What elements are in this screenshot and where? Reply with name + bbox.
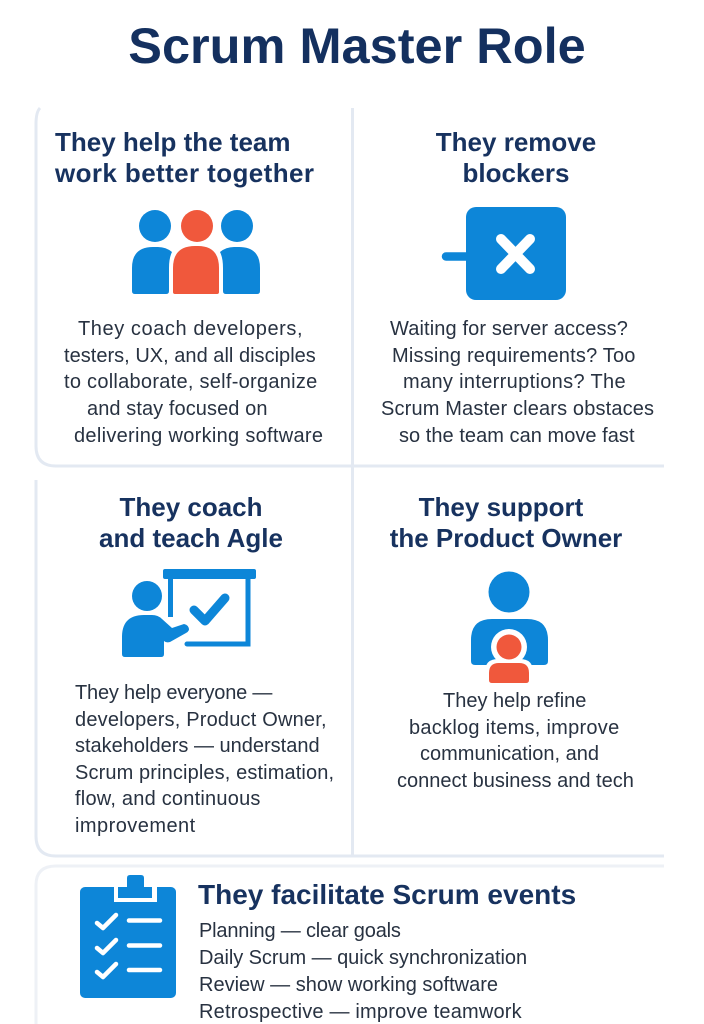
- heading: team: work better together: [55, 158, 314, 188]
- heading: coach: [99, 492, 283, 553]
- text: events list: Review — show working software: [199, 974, 498, 996]
- heading: product owner: the Product Owner: [390, 523, 622, 553]
- text: coach: stakeholders — understand: [75, 735, 320, 757]
- heading: blockers: blockers: [463, 158, 569, 188]
- text: events list: Daily Scrum — quick synchronization: [199, 947, 527, 969]
- heading: team: They help the team: [55, 127, 290, 157]
- text: team: and stay focused on: [87, 398, 268, 420]
- text: product owner: backlog items, improve: [409, 717, 619, 739]
- text: blockers: many interruptions? The: [403, 371, 626, 393]
- text: blockers: Scrum Master clears obstaces: [381, 398, 654, 420]
- text: events list: Retrospective — improve teamwork: [199, 1001, 522, 1023]
- text: coach: developers, Product Owner,: [75, 709, 327, 731]
- text: events list: [199, 920, 527, 1023]
- icon: checklist clipboard: [80, 875, 176, 998]
- text: coach: Scrum principles, estimation,: [75, 762, 334, 784]
- text: blockers: Missing requirements? Too: [392, 345, 636, 367]
- text: product owner: connect business and tech: [397, 770, 634, 792]
- icon: coach at board: [122, 569, 256, 657]
- heading: blockers: They remove: [436, 127, 596, 157]
- text: product owner: [397, 690, 634, 792]
- heading: team: [54, 127, 314, 188]
- title: Scrum Master Role: [128, 17, 586, 74]
- text: team: testers, UX, and all disciples: [64, 345, 316, 367]
- text: coach: flow, and continuous: [75, 788, 261, 810]
- icon: product owner: [471, 572, 548, 683]
- text: team: [64, 318, 323, 447]
- heading: product owner: [390, 492, 622, 553]
- text: team: They coach developers,: [78, 318, 303, 340]
- heading: coach: and teach Agle: [99, 523, 283, 553]
- text: blockers: so the team can move fast: [399, 425, 635, 447]
- text: team: delivering working software: [74, 425, 323, 447]
- text: blockers: Waiting for server access?: [390, 318, 628, 340]
- text: coach: improvement: [75, 815, 196, 837]
- icon: team people: [132, 210, 260, 294]
- heading: blockers: [436, 127, 596, 188]
- heading: product owner: They support: [419, 492, 583, 522]
- text: coach: They help everyone —: [75, 682, 272, 704]
- text: blockers: [381, 318, 654, 447]
- heading: coach: They coach: [119, 492, 263, 522]
- icon: blocker: [442, 207, 566, 300]
- text: coach: [75, 682, 334, 837]
- heading: events: They facilitate Scrum events: [198, 879, 576, 910]
- text: product owner: communication, and: [420, 743, 599, 765]
- text: team: to collaborate, self-organize: [64, 371, 318, 393]
- text: product owner: They help refine: [443, 690, 586, 712]
- panel: team: [54, 127, 314, 188]
- text: events list: Planning — clear goals: [199, 920, 401, 942]
